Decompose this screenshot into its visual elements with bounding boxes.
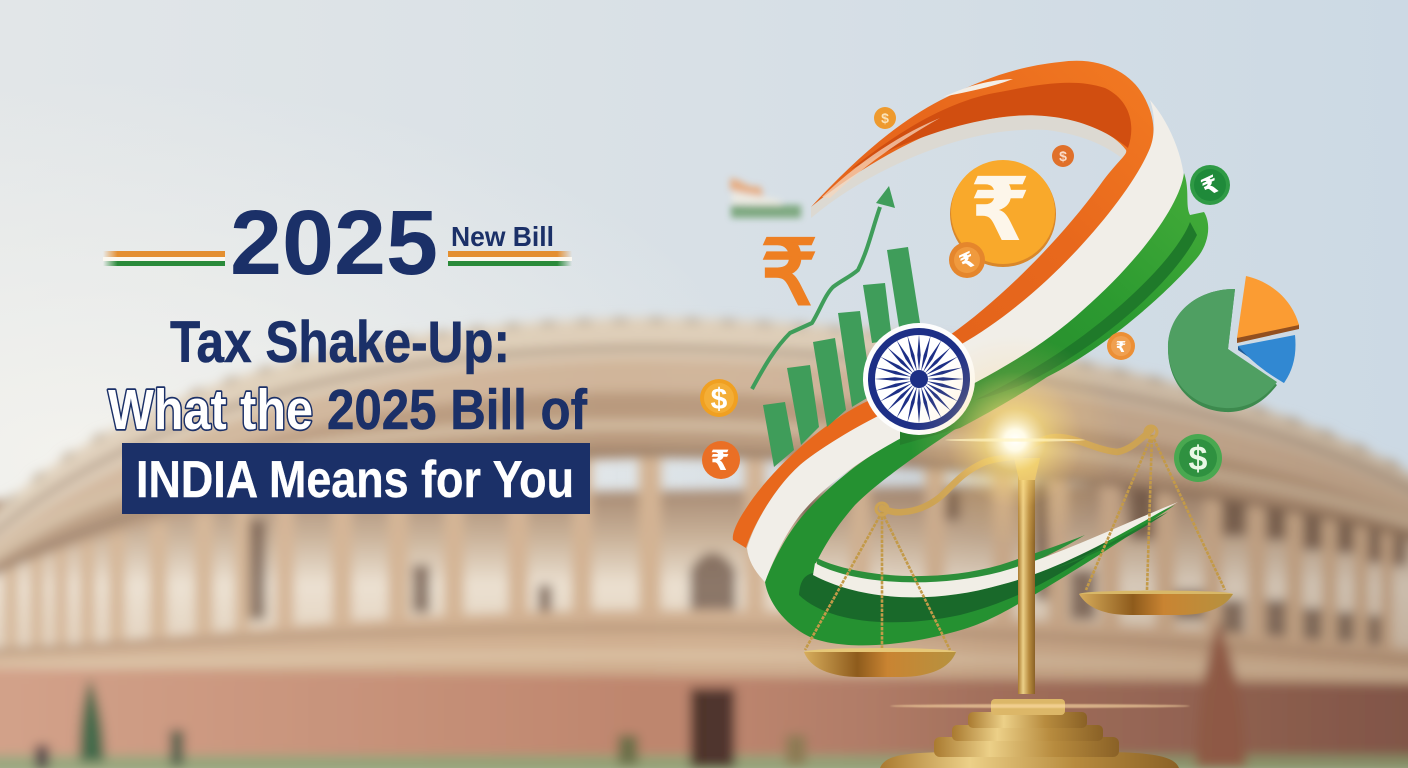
ribbon: upper white band <box>900 100 1184 435</box>
ribbon: lower orange band <box>733 400 880 548</box>
bar chart: rising green bars <box>763 247 920 467</box>
scale: right chains <box>1086 435 1225 590</box>
scale: right pan <box>1079 590 1233 615</box>
scale: beam <box>876 426 1157 515</box>
icon: orange rupee coin left: ₹ <box>710 444 730 477</box>
orange slice <box>1237 324 1299 343</box>
icon: green dollar coin right <box>1174 434 1222 482</box>
heading block <box>103 192 590 514</box>
icon: small rupee coin on large coin <box>949 242 985 278</box>
arrow: growth trend line <box>752 186 895 389</box>
ribbon: lower white band <box>747 413 905 582</box>
icon: amber dollar coin left <box>700 379 738 417</box>
blue slice <box>1238 346 1284 383</box>
icon: large rupee coin: ₹ <box>969 158 1031 261</box>
scale: left chains <box>805 512 950 650</box>
foreground trees and tower <box>79 678 104 762</box>
ribbon: upper orange band <box>811 61 1153 395</box>
ribbon: white under-strip <box>811 115 1129 218</box>
icon: dark orange dollar coin: $ <box>1059 148 1067 164</box>
ribbon: upper green band <box>900 173 1208 445</box>
icon: ashoka chakra emblem <box>863 323 975 435</box>
title line 1: Tax Shake-Up: <box>170 310 510 375</box>
icon: amber dollar coin left: $ <box>711 383 728 416</box>
icon: orange dollar coin top: $ <box>881 110 889 126</box>
icon: small orange rupee coin <box>1107 332 1135 360</box>
base light streak <box>890 704 1190 708</box>
icon: large rupee coin <box>950 158 1056 267</box>
ribbon: lower green curl <box>765 410 1178 645</box>
title line 2: navy words: 2025 Bill of <box>327 378 588 442</box>
green slice <box>1168 289 1277 412</box>
title line 2: outlined words: What the <box>108 378 313 442</box>
lower bands <box>0 610 1408 700</box>
icon: orange rupee symbol: ₹ <box>760 221 818 326</box>
heading year: 2025 <box>230 192 438 294</box>
column wall <box>0 480 1408 670</box>
scale: post <box>1014 458 1040 694</box>
icon: small rupee coin on large coin: ₹ <box>956 247 979 275</box>
icon: dark orange dollar coin <box>1052 145 1074 167</box>
dome bands <box>0 318 1408 575</box>
title line 3: navy banner: INDIA Means for You <box>136 451 574 509</box>
heading tag: new bill: New Bill <box>451 221 554 252</box>
icon: orange dollar coin top <box>874 107 896 129</box>
blurred flag on the dome <box>730 178 801 218</box>
ribbon: tricolour swoosh <box>733 61 1208 645</box>
icon: green rupee coin top right: ₹ <box>1197 170 1224 202</box>
building shading <box>0 318 1408 768</box>
tricolour rule right <box>448 251 572 266</box>
icon: orange rupee coin left <box>702 441 740 479</box>
icon: green dollar coin right: $ <box>1189 440 1208 478</box>
scale: left pan <box>804 648 956 677</box>
icon: small orange rupee coin: ₹ <box>1116 338 1126 356</box>
tricolour rule left <box>103 251 225 266</box>
scale: stepped base <box>880 699 1179 768</box>
scales of justice <box>804 426 1233 768</box>
sunburst glow on scale <box>910 335 1120 545</box>
icon: green rupee coin top right <box>1190 165 1230 205</box>
pie chart <box>1168 276 1299 412</box>
